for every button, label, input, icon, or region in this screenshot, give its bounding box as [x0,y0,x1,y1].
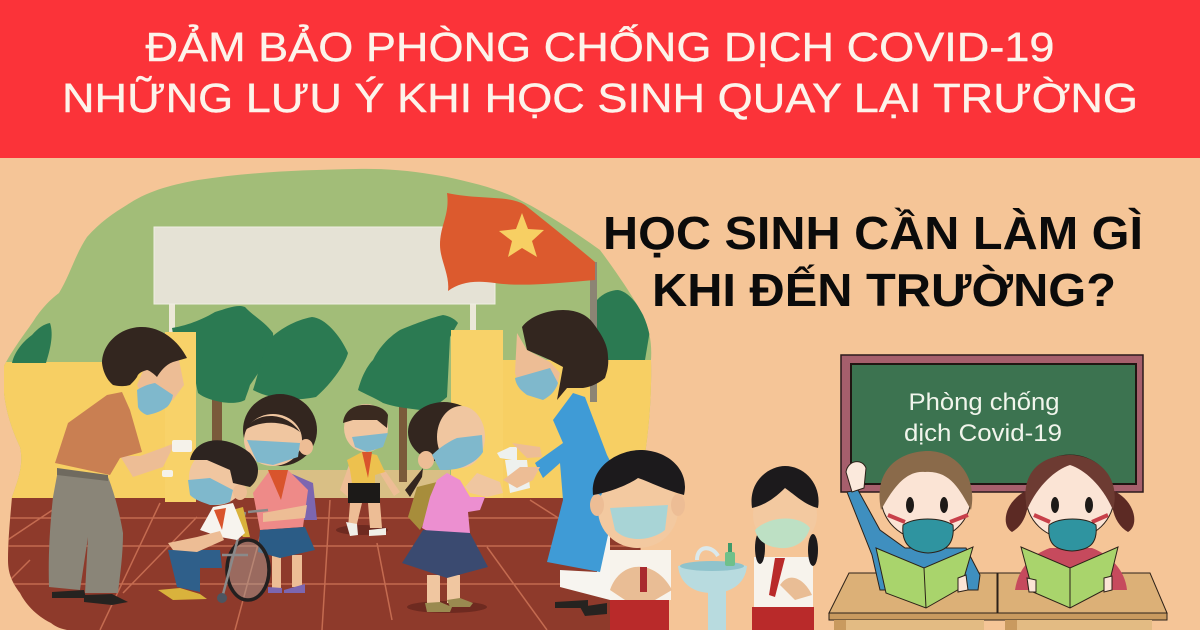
student boy raising hand [846,451,980,590]
scene background [0,160,660,630]
back boy [336,404,400,536]
header title: ĐẢM BẢO PHÒNG CHỐNG DỊCH COVID-19 [146,24,1054,70]
sink with faucet and soap [678,543,747,630]
trees [12,290,650,482]
flag [440,193,595,291]
heading question: KHI ĐẾN TRƯỜNG? [652,264,1116,316]
open books [876,547,1118,608]
sanitizer bottle [497,447,530,493]
flag pole [590,262,597,402]
teacher in blue ao dai [497,310,620,616]
blackboard text: dịch Covid-19 [904,420,1062,447]
header banner [0,0,1200,158]
blackboard text: Phòng chống [908,389,1060,416]
girl receiving sanitizer [402,402,503,613]
blackboard [841,355,1143,492]
gate pillars [165,330,503,502]
man with thermometer [49,327,192,605]
front girl [752,466,819,630]
desks [829,573,1167,630]
front boy washing hands [590,450,685,630]
school sign [154,227,495,340]
header title: NHỮNG LƯU Ý KHI HỌC SINH QUAY LẠI TRƯỜNG [62,75,1138,121]
heading question: HỌC SINH CẦN LÀM GÌ [603,207,1143,259]
student girl [1006,455,1134,590]
boy in wheelchair [158,440,269,603]
illustration: school gate scene [0,160,660,630]
girl with backpack [243,394,317,593]
